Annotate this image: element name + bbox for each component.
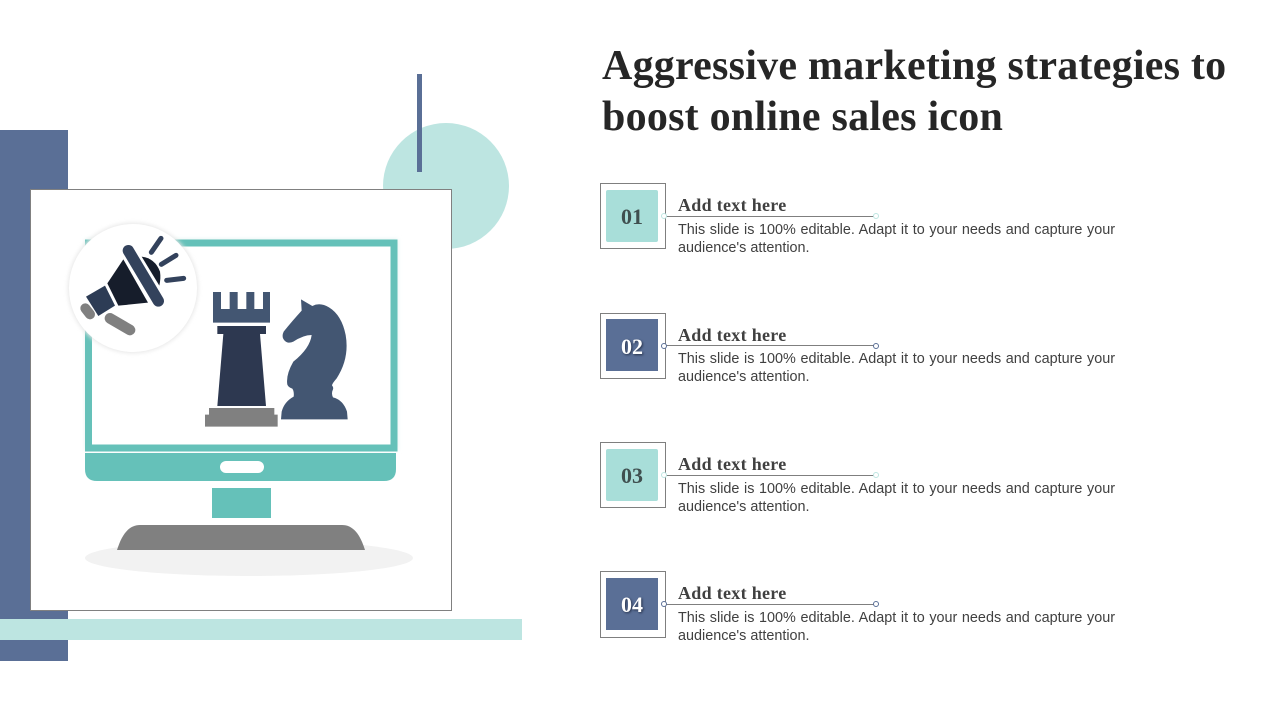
item 03: audience's attention. bbox=[678, 499, 810, 515]
item 02: This slide is 100% editable. Adapt it to your needs and capture your bbox=[678, 351, 1115, 367]
panel: illustration card bbox=[30, 189, 452, 611]
item 01: 01 bbox=[621, 204, 643, 229]
icon: megaphone badge bbox=[68, 223, 198, 353]
icon: monitor bbox=[85, 239, 413, 576]
item 04: audience's attention. bbox=[678, 628, 810, 644]
vertical navy accent bbox=[417, 74, 422, 172]
navy side bar bbox=[0, 130, 68, 661]
item 01: audience's attention. bbox=[678, 240, 810, 256]
item 02: audience's attention. bbox=[678, 369, 810, 385]
teal horizontal bar bbox=[0, 619, 522, 640]
icon: rook bbox=[205, 292, 278, 427]
item 04: Add text here bbox=[678, 583, 787, 603]
illustration: computer with chess pieces and megaphone bbox=[67, 222, 413, 576]
title: boost online sales icon bbox=[602, 94, 1003, 140]
item 03: This slide is 100% editable. Adapt it to your needs and capture your bbox=[678, 481, 1115, 497]
item 01 bbox=[600, 183, 1115, 256]
item 02 bbox=[600, 313, 1115, 385]
item 04 bbox=[600, 571, 1115, 644]
title bbox=[602, 43, 1226, 140]
item 02: 02 bbox=[621, 334, 643, 359]
icon: knight bbox=[281, 299, 348, 419]
item 03 bbox=[600, 442, 1115, 515]
item 04: 04 bbox=[621, 592, 643, 617]
teal circle bbox=[383, 123, 509, 249]
title: Aggressive marketing strategies to bbox=[602, 43, 1226, 89]
item 04: This slide is 100% editable. Adapt it to your needs and capture your bbox=[678, 610, 1115, 626]
item 01: This slide is 100% editable. Adapt it to your needs and capture your bbox=[678, 222, 1115, 238]
item 02: Add text here bbox=[678, 325, 787, 345]
item 01: Add text here bbox=[678, 195, 787, 215]
item 03: 03 bbox=[621, 463, 643, 488]
item 03: Add text here bbox=[678, 454, 787, 474]
